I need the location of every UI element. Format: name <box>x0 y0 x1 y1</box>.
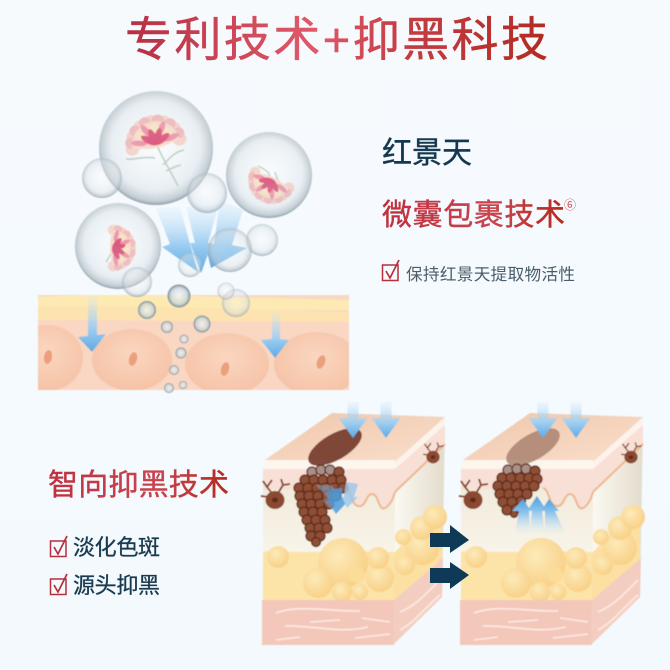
arrows: blocking upward <box>512 496 565 533</box>
icon: melanocyte <box>261 442 444 509</box>
superscript 6: ⑥ <box>564 198 576 212</box>
arrow: dark lower <box>430 562 469 589</box>
checklist item: 保持红景天提取物活性 <box>382 260 575 284</box>
checklist item: 保持红景天提取物活性: 保持红景天提取物活性 <box>406 265 575 284</box>
skin cube: before <box>261 402 447 645</box>
skin layers <box>38 294 350 390</box>
heading: 智向抑黑技术: 智向抑黑技术 <box>48 469 229 502</box>
checklist item: 淡化色斑: 淡化色斑 <box>73 535 160 560</box>
arrow: skin left <box>78 296 106 352</box>
icon: checkbox <box>382 260 399 280</box>
faded spot <box>501 421 565 473</box>
icon: checkbox <box>50 574 67 594</box>
bubble: large with flower <box>99 91 213 205</box>
bubble: left with flower <box>75 203 161 289</box>
illustration: microcapsule bubbles entering skin <box>38 90 350 394</box>
bubble: right with flower <box>226 132 312 218</box>
arrow: dark upper <box>430 525 469 553</box>
heading: 红景天: 红景天 <box>382 137 472 170</box>
melanin cluster <box>493 464 542 518</box>
melanin cluster <box>294 465 348 546</box>
arrow: incoming 2 <box>372 402 400 438</box>
title: 专利技术+抑黑科技 <box>125 13 548 66</box>
small bubbles <box>82 158 278 393</box>
arrows: centre three <box>156 200 247 273</box>
heading: 微囊包裹技术: 微囊包裹技术 <box>382 199 565 232</box>
arrows: penetrating into cluster <box>316 482 358 514</box>
arrow: incoming 1 <box>338 402 368 438</box>
arrow: incoming 1 <box>528 402 558 438</box>
checklist item: 源头抑黑: 源头抑黑 <box>73 573 160 598</box>
icon: checkbox <box>50 536 67 556</box>
dark spot <box>303 421 367 473</box>
arrow: skin right <box>261 312 289 358</box>
arrow: incoming 2 <box>562 402 590 438</box>
icon: melanocyte <box>459 442 642 509</box>
skin cube: after <box>459 402 645 645</box>
